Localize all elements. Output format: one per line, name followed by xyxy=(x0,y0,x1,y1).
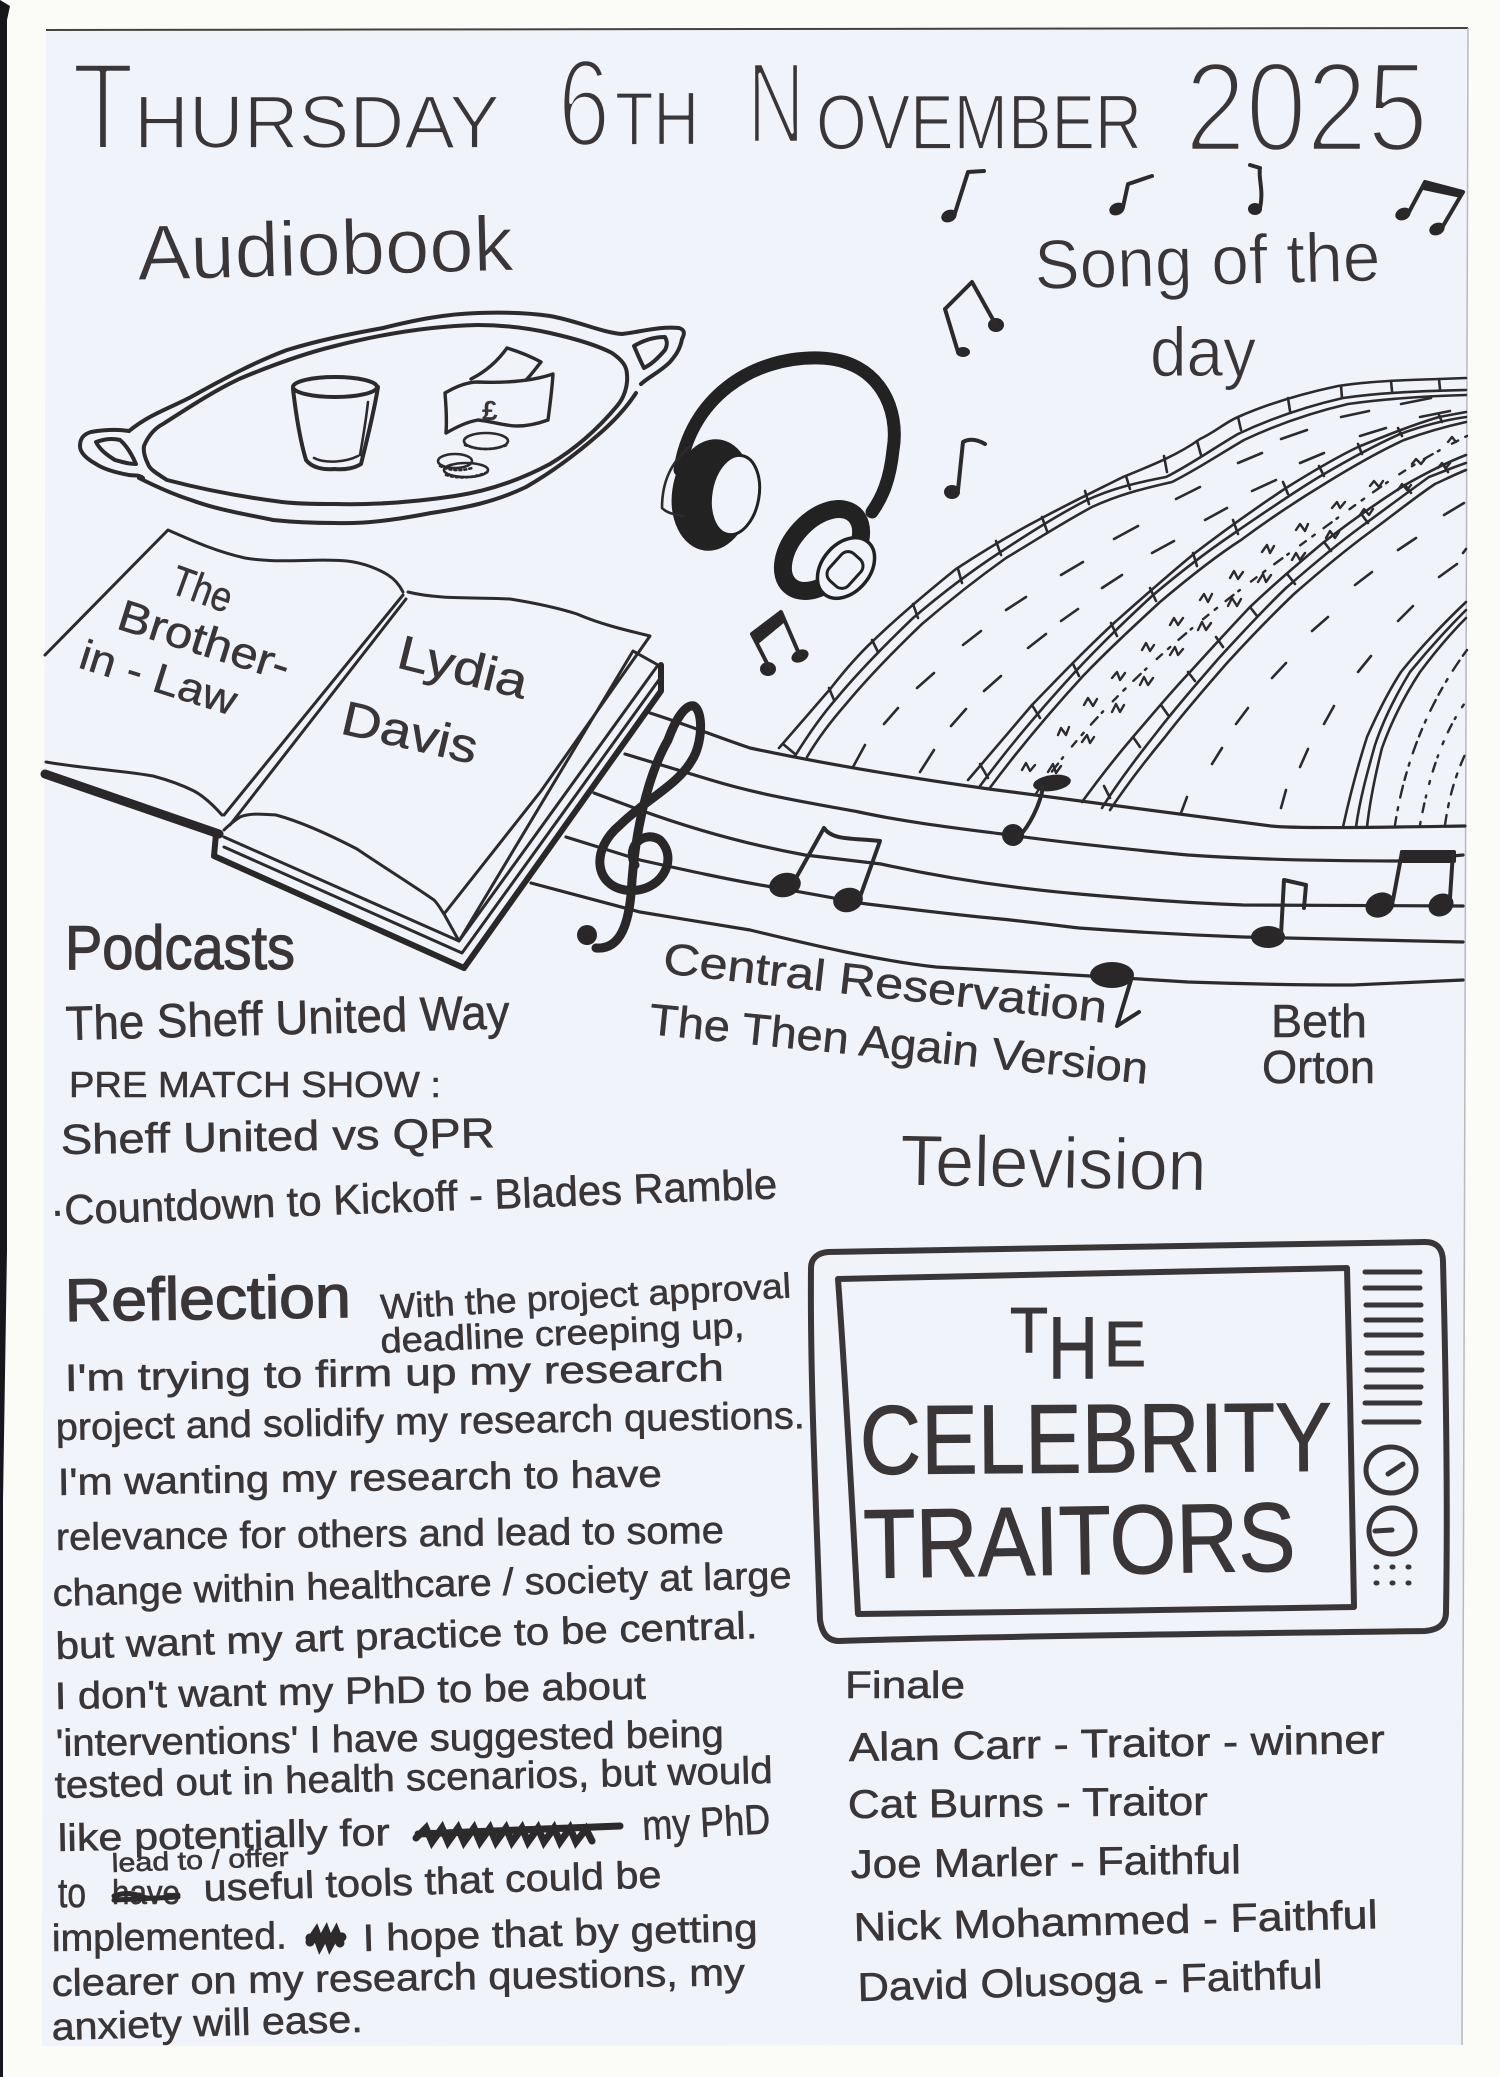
podcast list: The Sheff United Way xyxy=(65,986,510,1051)
heading: Song of the day: Song of the xyxy=(1033,218,1381,304)
finale list: Joe Marler - Faithful xyxy=(851,1838,1241,1887)
book title text: Brother- xyxy=(112,591,296,691)
heading: Song of the day: day xyxy=(1150,313,1256,391)
icon: banknotes: £ xyxy=(482,395,498,426)
tv show title: TRAITORS xyxy=(862,1481,1296,1599)
reflection paragraph: lead to / offer xyxy=(111,1842,289,1878)
song title and artist: Orton xyxy=(1262,1041,1375,1093)
book title text xyxy=(74,556,534,775)
reflection paragraph: to xyxy=(58,1869,86,1916)
title: OVEMBER xyxy=(816,78,1142,166)
road lane dashes xyxy=(853,398,1466,813)
title: HURSDAY xyxy=(134,80,500,164)
reflection paragraph: relevance for others and lead to some xyxy=(56,1510,724,1559)
tv show title xyxy=(859,1294,1332,1599)
reflection paragraph: implemented. xyxy=(52,1916,287,1960)
music notes floating xyxy=(752,165,1463,676)
book title text: Lydia xyxy=(392,626,534,710)
icon: coins xyxy=(438,433,508,477)
title: N xyxy=(747,38,805,168)
reflection paragraph: project and solidify my research questions. xyxy=(55,1395,805,1449)
tv show title: H xyxy=(1048,1298,1098,1397)
icon: television set xyxy=(811,1242,1447,1641)
tv speaker grille xyxy=(1364,1272,1422,1422)
song title and artist: The Then Again Version xyxy=(647,995,1150,1094)
icon: headphones xyxy=(662,358,894,609)
title: T xyxy=(72,38,134,176)
heading: Podcasts: Podcasts xyxy=(65,914,295,983)
finale list: Alan Carr - Traitor - winner xyxy=(848,1718,1385,1770)
book title text: The xyxy=(165,556,239,622)
reflection paragraph: my PhD xyxy=(641,1795,771,1849)
road illustration xyxy=(779,378,1467,827)
reflection paragraph xyxy=(51,1267,805,2049)
icon: open book xyxy=(45,530,661,968)
title: 6 xyxy=(558,35,610,173)
icon: glass xyxy=(293,377,378,469)
roundabout texture xyxy=(1395,650,1467,825)
heading: Television: Television xyxy=(900,1121,1207,1206)
finale list: Finale xyxy=(845,1665,965,1707)
icon: serving tray with glass and money xyxy=(80,313,684,523)
finale list: Cat Burns - Traitor xyxy=(848,1780,1208,1827)
reflection paragraph: I hope that by getting xyxy=(362,1908,758,1960)
tv show title: CELEBRITY xyxy=(859,1382,1332,1495)
title: 2025 xyxy=(1185,36,1428,178)
reflection paragraph: but want my art practice to be central. xyxy=(55,1605,758,1668)
finale list: David Olusoga - Faithful xyxy=(857,1953,1323,2010)
roundabout edge xyxy=(1343,602,1466,827)
podcast list: PRE MATCH SHOW : xyxy=(69,1064,441,1105)
icon: treble clef xyxy=(577,706,701,948)
crossed-out scribbles xyxy=(114,1826,620,1944)
reflection paragraph: I'm trying to firm up my research xyxy=(64,1348,724,1400)
heading: Audiobook: Audiobook xyxy=(136,199,515,297)
icon: banknotes xyxy=(445,348,553,433)
reflection paragraph: clearer on my research questions, my xyxy=(51,1952,745,2005)
tv show title: E xyxy=(1104,1308,1146,1380)
music notes on staff xyxy=(766,772,1458,1026)
central reservation texture xyxy=(1022,436,1467,795)
reflection paragraph: 'interventions' I have suggested being xyxy=(56,1714,724,1765)
song title and artist: Beth xyxy=(1271,995,1367,1047)
finale list xyxy=(845,1665,1385,2010)
reflection paragraph: have xyxy=(112,1874,180,1912)
reflection paragraph: anxiety will ease. xyxy=(51,1999,363,2049)
reflection paragraph: I don't want my PhD to be about xyxy=(54,1666,647,1718)
reflection paragraph: I'm wanting my research to have xyxy=(58,1454,662,1504)
outer road wall xyxy=(779,378,1466,757)
book title text: in - Law xyxy=(74,631,244,725)
heading: Song of the day xyxy=(1033,218,1381,391)
reflection paragraph: With the project approval xyxy=(379,1267,792,1327)
tv knobs xyxy=(1366,1447,1416,1554)
song title and artist: Central Reservation xyxy=(661,934,1110,1033)
reflection paragraph: deadline creeping up, xyxy=(380,1306,745,1361)
reflection paragraph: tested out in health scenarios, but would xyxy=(54,1750,773,1807)
podcast list xyxy=(50,986,778,1234)
heading: Reflection: Reflection xyxy=(64,1263,351,1334)
title: TH xyxy=(615,77,699,162)
reflection paragraph: like potentially for xyxy=(57,1812,390,1860)
book title text: Davis xyxy=(337,692,483,775)
reflection paragraph: useful tools that could be xyxy=(203,1854,662,1910)
podcast list: ·Countdown to Kickoff - Blades Ramble xyxy=(50,1160,778,1234)
central reservation walls xyxy=(968,412,1466,810)
music staff lines xyxy=(531,713,1465,985)
title xyxy=(72,35,1428,178)
reflection paragraph: change within healthcare / society at large xyxy=(52,1555,792,1615)
finale list: Nick Mohammed - Faithful xyxy=(853,1893,1378,1950)
tv show title: T xyxy=(1010,1294,1048,1366)
podcast list: Sheff United vs QPR xyxy=(60,1109,495,1163)
song title and artist xyxy=(647,934,1375,1094)
